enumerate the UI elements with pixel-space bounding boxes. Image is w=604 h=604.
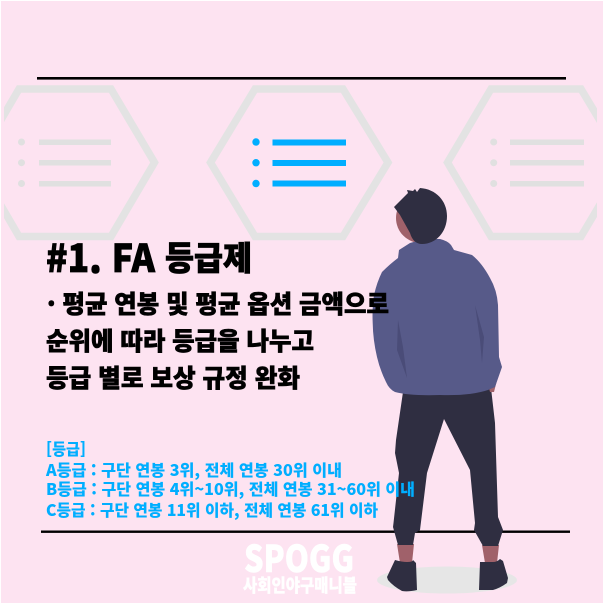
grade criteria list: A등급 : 구단 연봉 3위, 전체 연봉 30위 이내	[45, 457, 342, 481]
hoodie fold left	[397, 320, 407, 378]
neck and face	[396, 193, 446, 243]
trousers	[393, 388, 503, 546]
hair	[394, 188, 447, 244]
grade criteria list: B등급 : 구단 연봉 4위~10위, 전체 연봉 31~60위 이내	[46, 476, 415, 500]
description text: 등급 별로 보상 규정 완화	[46, 359, 300, 395]
description text	[46, 285, 389, 395]
logo wordmark: 사회인야구매니블	[243, 572, 357, 598]
ankles	[397, 544, 499, 563]
title: #1. FA	[46, 228, 156, 283]
shoes	[387, 559, 508, 591]
title	[46, 228, 252, 283]
hoodie fold right	[475, 305, 484, 363]
description text: · 평균 연봉 및 평균 옵션 금액으로	[47, 285, 389, 321]
title: 등급제	[165, 232, 252, 280]
grade criteria list: C등급 : 구단 연봉 11위 이하, 전체 연봉 61위 이하	[46, 497, 378, 521]
hexagon: centre highlighted list	[210, 89, 388, 236]
bottom rule	[41, 530, 570, 533]
hexagon: right grey list	[448, 89, 604, 236]
logo wordmark	[243, 529, 357, 598]
top rule	[37, 77, 566, 80]
hand	[488, 380, 497, 392]
hoodie	[373, 239, 502, 395]
illustration: standing person seen from behind	[373, 188, 517, 594]
grade criteria list	[45, 436, 415, 521]
grade criteria list: [등급]	[46, 436, 86, 460]
hexagon: left grey list	[0, 89, 154, 236]
ground shadow	[377, 566, 517, 594]
description text: 순위에 따라 등급을 나누고	[46, 322, 314, 358]
logo wordmark: SPOGG	[244, 529, 354, 583]
